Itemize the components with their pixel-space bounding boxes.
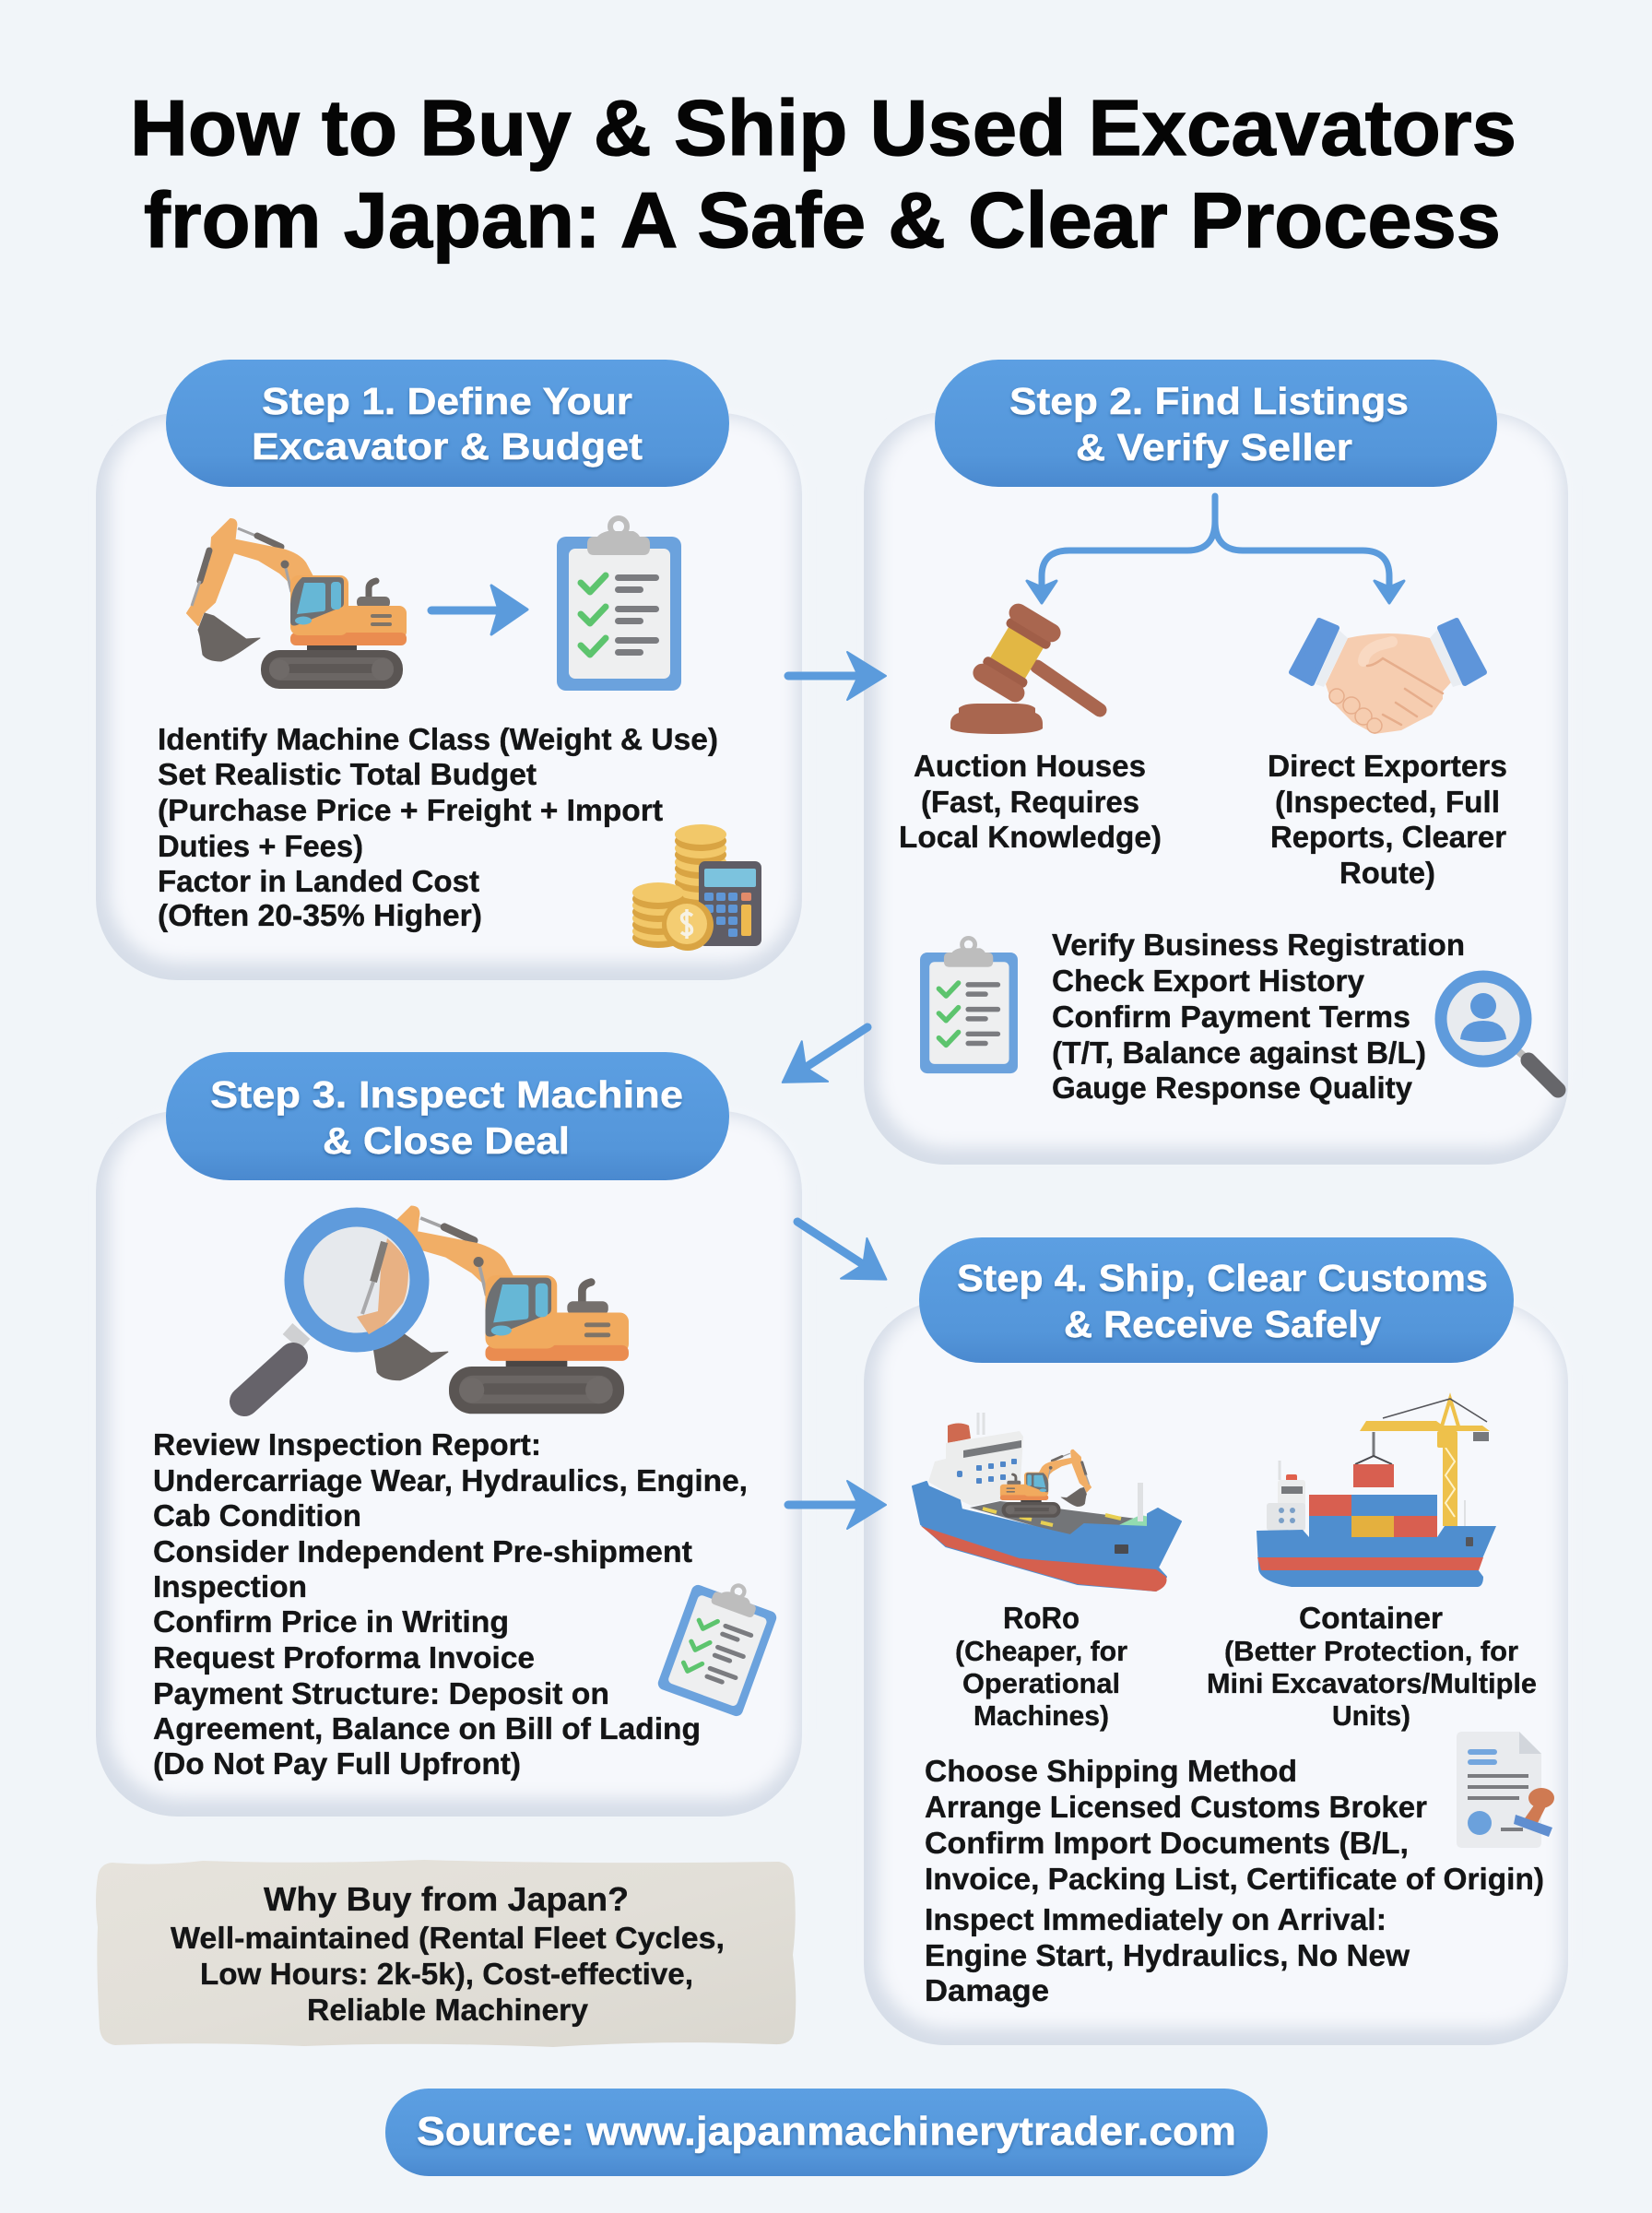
panel: step 3 [96,1052,802,1817]
text: container option [1207,1601,1537,1732]
text: shipping and customs list: Arrange Licensed Customs Broker [925,1790,1427,1824]
icon: magnifier with person [1441,976,1558,1090]
text: step 1 list: Set Realistic Total Budget [158,757,537,791]
heading: step 3: Step 3. Inspect Machine [210,1073,683,1116]
callout: why buy from Japan: Reliable Machinery [307,1993,589,2027]
heading: step 2 [935,360,1497,487]
text: step 1 list: (Often 20-35% Higher) [158,898,482,932]
heading: step 3: & Close Deal [323,1119,570,1162]
text: auction houses [899,749,1162,854]
heading: step 4 [919,1237,1514,1363]
text: step 3 list [153,1427,748,1781]
panel: step 4 [864,1237,1568,2045]
callout: why buy from Japan: Well-maintained (Rental Fleet Cycles, [171,1921,725,1955]
text: shipping and customs list: Inspect Immediately on Arrival: [925,1902,1386,1936]
title: How to Buy & Ship Used Excavators [130,85,1516,172]
text: step 3 list: Consider Independent Pre-shipment [153,1534,692,1568]
text: auction houses: (Fast, Requires [921,785,1139,819]
text: step 3 list: Undercarriage Wear, Hydraulics, Engine, [153,1463,748,1497]
heading: step 1: Step 1. Define Your [262,380,632,422]
text: RoRo option: (Cheaper, for [955,1635,1127,1667]
icon: excavator under magnifier [244,1207,629,1414]
icon: tilted checklist clipboard [656,1570,783,1718]
heading: step 2: & Verify Seller [1076,426,1352,468]
icon: checklist clipboard [920,938,1018,1073]
text: auction houses: Local Knowledge) [899,820,1162,854]
text: auction houses: Auction Houses [914,749,1146,783]
text: container option: (Better Protection, for [1224,1635,1518,1667]
panel: step 2 [864,360,1568,1165]
text: shipping and customs list: Engine Start, Hydraulics, No New [925,1938,1410,1972]
callout: why buy from Japan [96,1860,796,2047]
text: direct exporters [1268,749,1507,890]
text: shipping and customs list: Choose Shipping Method [925,1754,1297,1788]
text: direct exporters: (Inspected, Full [1275,785,1500,819]
text: step 3 list: Agreement, Balance on Bill of Lading [153,1711,701,1746]
text: step 3 list: Confirm Price in Writing [153,1604,509,1639]
text: seller verification list: (T/T, Balance against B/L) [1052,1035,1426,1070]
title: from Japan: A Safe & Clear Process [144,177,1501,265]
text: container option: Units) [1332,1699,1410,1732]
title [130,85,1516,265]
text: step 1 list: Identify Machine Class (Weight & Use) [158,722,718,756]
icon: gavel [950,600,1100,734]
heading: step 3 [166,1052,729,1180]
text: direct exporters: Reports, Clearer [1270,820,1506,854]
source pill: Source: www.japanmachinerytrader.com [417,2109,1236,2154]
heading: step 1: Excavator & Budget [252,425,643,467]
icon: document with stamp [1457,1732,1554,1848]
text: RoRo option: Operational [962,1667,1120,1699]
arrow: step 1 to step 2 [788,652,886,700]
icon: handshake [1292,621,1484,734]
text: RoRo option: RoRo [1003,1601,1080,1635]
text: step 3 list: Inspection [153,1569,307,1604]
arrow: branching to two options [1027,496,1404,603]
text: step 1 list: (Purchase Price + Freight + Import [158,793,663,827]
text: shipping and customs list: Invoice, Packing List, Certificate of Origin) [925,1862,1544,1896]
text: RoRo option: Machines) [974,1699,1109,1732]
text: direct exporters: Route) [1339,856,1435,890]
arrow: step 3 to step 4 [785,1201,900,1299]
text: shipping and customs list: Damage [925,1973,1049,2007]
text: seller verification list: Confirm Payment Terms [1052,1000,1410,1034]
text: direct exporters: Direct Exporters [1268,749,1507,783]
callout: why buy from Japan: Low Hours: 2k-5k), Cost-effective, [200,1957,693,1991]
text: shipping and customs list: Confirm Import Documents (B/L, [925,1826,1409,1860]
text: seller verification list [1052,928,1465,1105]
heading: step 1 [166,360,729,487]
panel: step 1 [96,360,802,980]
text: step 3 list: (Do Not Pay Full Upfront) [153,1746,521,1781]
heading: step 4: Step 4. Ship, Clear Customs [957,1257,1488,1299]
icon: checklist clipboard [557,518,681,691]
heading: step 4: & Receive Safely [1064,1303,1381,1345]
icon: container ship [1257,1399,1496,1587]
arrow: step 2 to step 3 [770,1007,880,1103]
text: RoRo option [955,1601,1127,1732]
arrow: excavator to checklist [431,586,527,634]
text: step 1 list: Factor in Landed Cost [158,864,479,898]
text: container option: Container [1299,1601,1443,1635]
text: step 1 list: Duties + Fees) [158,829,363,863]
text: seller verification list: Verify Business Registration [1052,928,1465,962]
text: step 3 list: Review Inspection Report: [153,1427,541,1462]
arrow: step 3 to shipping options [788,1481,886,1529]
text: shipping and customs list [925,1754,1544,2007]
text: seller verification list: Check Export History [1052,964,1365,998]
text: seller verification list: Gauge Response Quality [1052,1071,1413,1105]
callout: why buy from Japan: Why Buy from Japan? [264,1880,629,1918]
text: container option: Mini Excavators/Multiple [1207,1667,1537,1699]
source pill [385,2089,1268,2176]
heading: step 2: Step 2. Find Listings [1009,380,1409,422]
text: step 3 list: Request Proforma Invoice [153,1640,535,1675]
text: step 3 list: Payment Structure: Deposit on [153,1676,609,1710]
text: step 3 list: Cab Condition [153,1498,361,1533]
icon: excavator [187,519,407,689]
icon: coins and calculator [632,824,761,951]
text: step 1 list [158,722,718,932]
icon: RoRo ship [913,1413,1181,1592]
